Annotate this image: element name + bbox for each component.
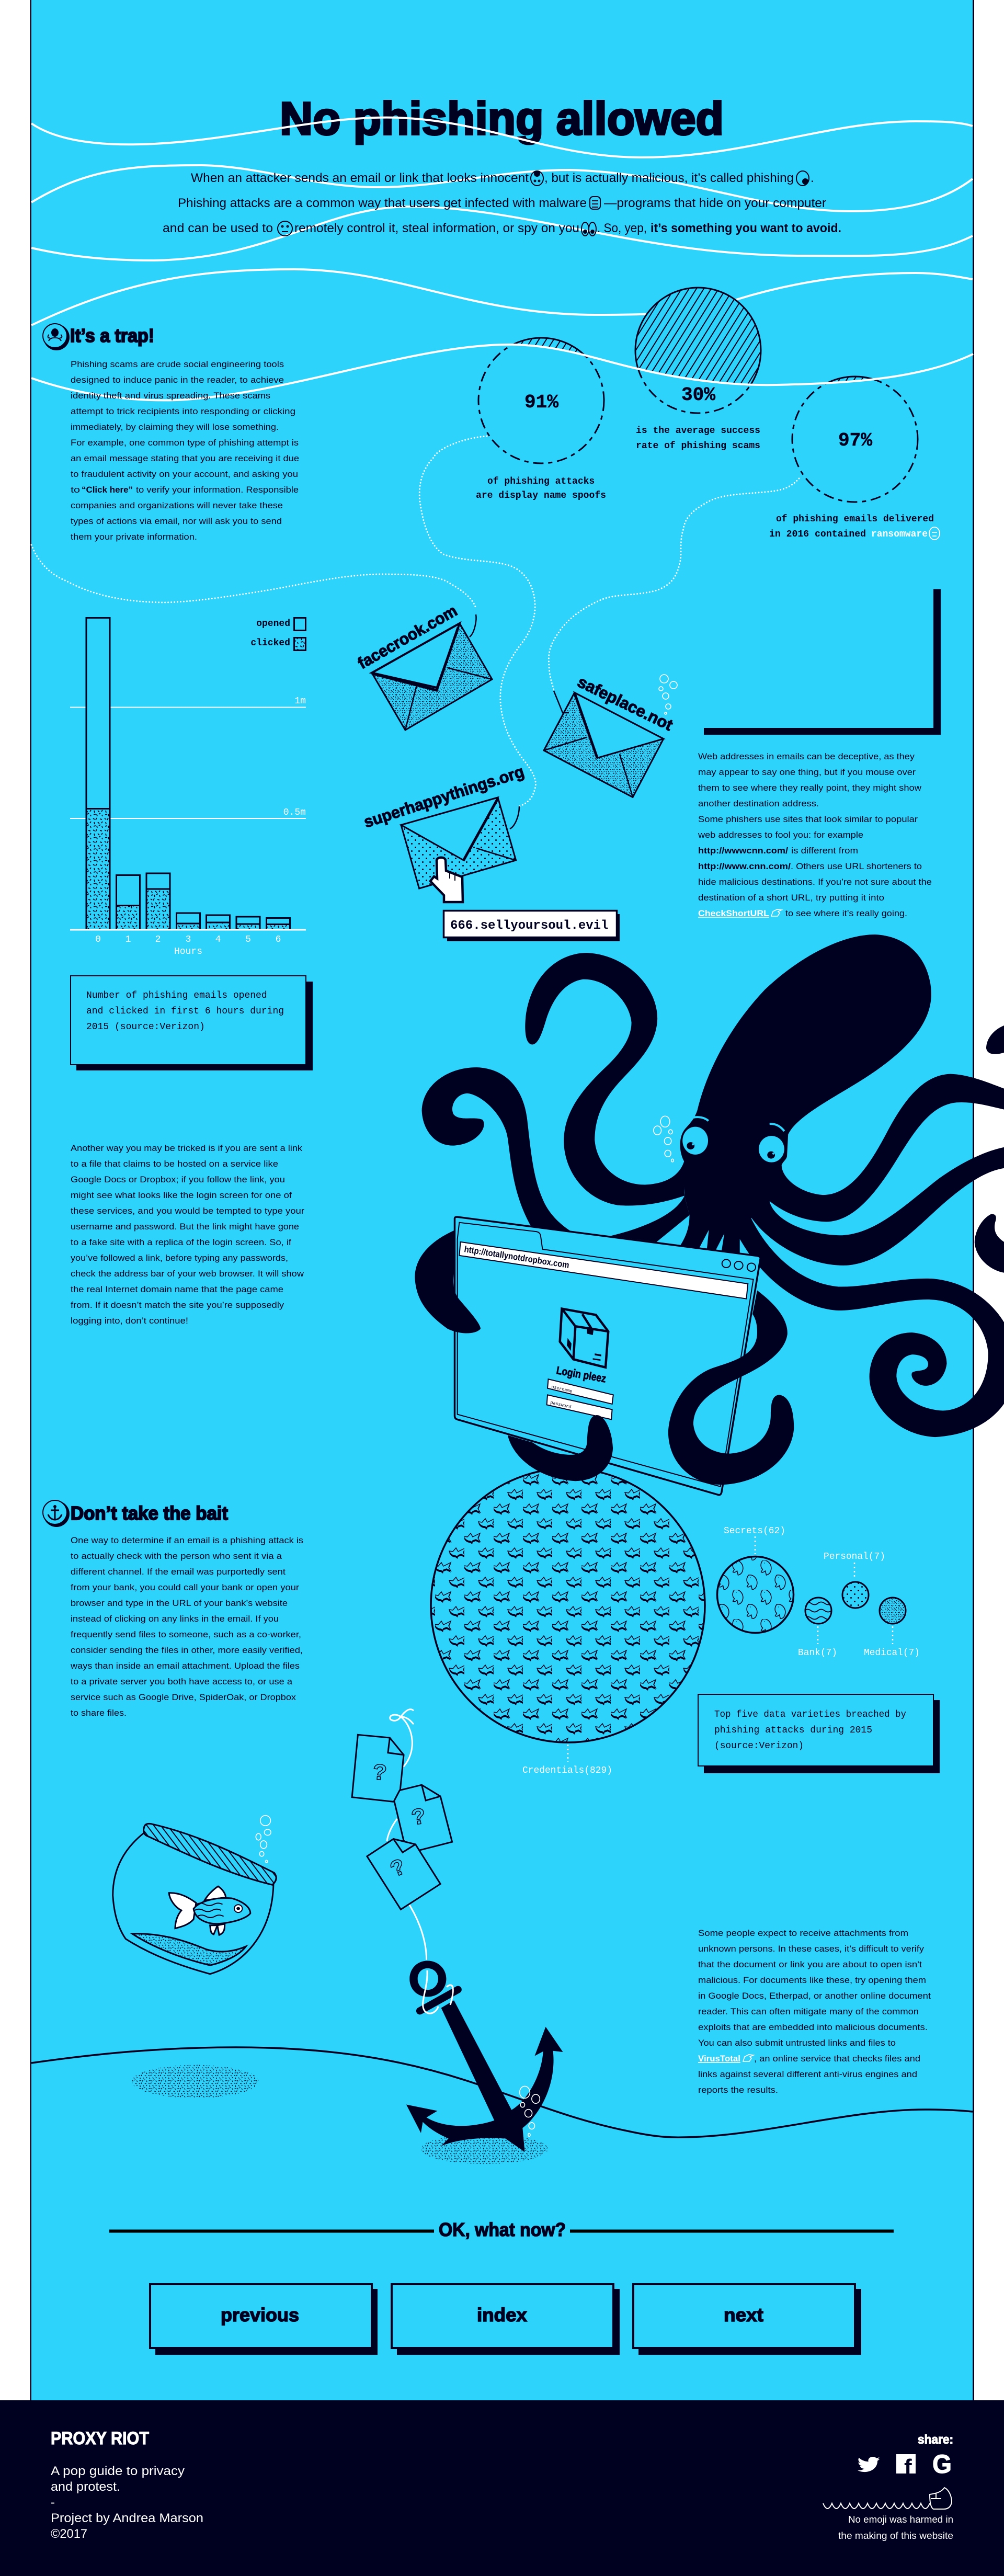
text block: phishing scams: immediately, by claiming they will lose something. bbox=[71, 422, 279, 432]
text block: attachments: reports the results. bbox=[698, 2085, 778, 2095]
legend bbox=[250, 618, 305, 651]
text block: phishing scams: Phishing scams are crude social engineering tools bbox=[71, 359, 284, 369]
bar: hour 2 bbox=[146, 873, 170, 930]
text block: attachments: malicious. For documents like these, try opening them bbox=[698, 1975, 926, 1985]
text block: web addresses: http://wwwcnn.com/ bbox=[698, 846, 788, 856]
intro paragraph: Phishing attacks are a common way that users get infected with malware bbox=[178, 196, 587, 210]
arm: middle right bbox=[751, 1147, 1004, 1266]
intro paragraph: —programs that hide on your computer bbox=[604, 196, 826, 210]
icon: google: G bbox=[932, 2449, 952, 2479]
envelope: safeplace: safeplace.not bbox=[575, 673, 676, 734]
text block: verify via another channel: to share files. bbox=[71, 1708, 127, 1718]
icon: octopus badge bbox=[43, 324, 70, 350]
seabed line bbox=[31, 2047, 973, 2137]
section heading: It's a trap bbox=[43, 324, 154, 350]
legend: opened bbox=[256, 619, 290, 629]
heading: OK, what now bbox=[109, 2219, 894, 2240]
text block: phishing scams: to fraudulent activity on your account, and asking you bbox=[71, 469, 298, 479]
bar: hour 0 bbox=[86, 618, 110, 930]
icon: malware emoji bbox=[590, 197, 600, 209]
stat: 91 percent: of phishing attacks bbox=[487, 476, 595, 487]
footer description: - bbox=[51, 2495, 55, 2510]
bubbles bbox=[654, 1116, 674, 1162]
footer description: A pop guide to privacy bbox=[51, 2464, 185, 2478]
question marks on files bbox=[372, 1760, 428, 1884]
icon: eyes emoji bbox=[581, 222, 596, 236]
bubble: credentials bbox=[431, 1468, 705, 1742]
intro paragraph: . So, yep, bbox=[597, 221, 647, 235]
intro paragraph: . bbox=[811, 171, 814, 185]
stat: 97 percent: ransomware bbox=[871, 529, 928, 540]
icon: bubbles bbox=[659, 675, 677, 714]
footer description bbox=[51, 2464, 203, 2541]
shadow under bowl bbox=[132, 2065, 259, 2098]
stat: 30 percent: rate of phishing scams bbox=[636, 441, 760, 451]
file 3 bbox=[367, 1839, 440, 1909]
share links bbox=[858, 2433, 953, 2480]
button: previous: previous bbox=[221, 2304, 299, 2326]
icon: phishing emoji bbox=[796, 171, 809, 186]
stat: 91 percent: are display name spoofs bbox=[476, 491, 606, 501]
bubble chart: data varieties breached: Secrets(62) bbox=[724, 1526, 785, 1536]
icon: fish hook bbox=[510, 806, 519, 829]
text block: web addresses: may appear to say one thing, but if you mouse over bbox=[698, 767, 916, 777]
text block: web addresses bbox=[698, 751, 932, 918]
bar: hour 6 bbox=[267, 918, 290, 930]
arm: left curl bbox=[422, 1067, 572, 1232]
text block: fake file link: from. If it doesn’t match the site you’re supposedly bbox=[71, 1300, 284, 1310]
text block: web addresses: to see where it’s really going. bbox=[785, 908, 907, 918]
bar: hour 5 bbox=[236, 917, 260, 930]
footer description: Project by Andrea Marson bbox=[51, 2511, 203, 2525]
bar chart: phishing emails opened and clicked: 1 bbox=[126, 934, 131, 945]
text block: attachments: unknown persons. In these cases, it’s difficult to verify bbox=[698, 1944, 925, 1954]
intro paragraph: it’s something you want to avoid. bbox=[651, 221, 841, 235]
text block: phishing scams: them your private information. bbox=[71, 532, 197, 542]
arm: upper right bbox=[769, 1074, 1004, 1222]
text block: verify via another channel: browser and type in the URL of your bank’s website bbox=[71, 1598, 288, 1608]
tooltip: fake url: 666.sellyoursoul.evil bbox=[450, 919, 608, 933]
icon: facebook bbox=[896, 2454, 916, 2480]
text block: fake file link: check the address bar of your web browser. It will show bbox=[71, 1269, 304, 1279]
octopus front arms bbox=[415, 1230, 794, 1485]
icon: fish hook bbox=[470, 614, 476, 637]
arm: left gripping window bbox=[415, 1230, 481, 1333]
text block: fake file link: to a file that claims to be hosted on a service like bbox=[71, 1159, 278, 1169]
octopus bbox=[422, 934, 1004, 1437]
stat: 30 percent bbox=[635, 288, 761, 451]
bar chart: phishing emails opened and clicked: 4 bbox=[215, 934, 221, 945]
text block: attachments: VirusTotal bbox=[698, 2054, 740, 2064]
envelope: safeplace bbox=[544, 673, 677, 797]
bar chart: phishing emails opened and clicked: 1m bbox=[294, 696, 306, 706]
bubble: personal bbox=[842, 1582, 869, 1608]
bubble: secrets bbox=[717, 1556, 794, 1633]
intro paragraph: and can be used to bbox=[163, 221, 273, 235]
eye: left bbox=[682, 1127, 708, 1155]
text block: verify via another channel: different channel. If the email was purportedly sent bbox=[71, 1567, 286, 1577]
button: index bbox=[392, 2284, 620, 2355]
text block: attachments: links against several different anti-virus engines and bbox=[698, 2069, 917, 2079]
text block: verify via another channel: ways than inside an email attachment. Upload the files bbox=[70, 1661, 300, 1671]
anchor bbox=[406, 1961, 563, 2152]
caption box: data varieties source: phishing attacks during 2015 bbox=[714, 1725, 872, 1736]
caption box: data varieties source: (source:Verizon) bbox=[714, 1741, 804, 1751]
arm tip: off panel curl bbox=[975, 1214, 1004, 1273]
heading: OK, what now: OK, what now? bbox=[439, 2219, 566, 2240]
button: previous bbox=[150, 2284, 378, 2355]
bar chart: phishing emails opened and clicked: 0.5m bbox=[283, 807, 306, 818]
text block: verify via another channel: instead of clicking on any links in the email. If you bbox=[71, 1614, 279, 1624]
text block: fake file link: you’ve followed a link, before typing any passwords, bbox=[71, 1253, 288, 1263]
bar chart: phishing emails opened and clicked: 5 bbox=[245, 934, 251, 945]
envelope: facecrook bbox=[355, 601, 492, 730]
text block: phishing scams bbox=[71, 359, 299, 542]
bar chart: phishing emails opened and clicked: 2 bbox=[155, 934, 161, 945]
text block: web addresses: them to see where they really point, they might show bbox=[698, 783, 922, 793]
title: No phishing allowed bbox=[280, 93, 724, 144]
button: index: index bbox=[477, 2304, 527, 2326]
text block: fake file link: Another way you may be tricked is if you are sent a link bbox=[71, 1143, 303, 1153]
stat: 30 percent: 30% bbox=[681, 384, 715, 406]
icon: anchor badge bbox=[43, 1500, 70, 1527]
arm tip: off panel top bbox=[986, 1025, 1004, 1054]
question marks on files: ? bbox=[410, 1804, 428, 1832]
text block: web addresses: CheckShortURL bbox=[698, 908, 769, 918]
browser window: fake login page bbox=[454, 1217, 760, 1495]
envelope: superhappythings bbox=[361, 762, 527, 902]
goldfish bbox=[169, 1886, 250, 1935]
bar chart: phishing emails opened and clicked: 3 bbox=[186, 934, 191, 945]
arm: bottom gripping window bbox=[508, 1415, 613, 1481]
text block: attachments: in Google Docs, Etherpad, or another online document bbox=[698, 1991, 931, 2001]
bubble chart: data varieties breached: Medical(7) bbox=[864, 1648, 920, 1658]
logo: PROXY RIOT bbox=[51, 2429, 149, 2448]
eye: right bbox=[759, 1136, 784, 1162]
envelope: facecrook: facecrook.com bbox=[355, 601, 460, 673]
text block: fake file link: these services, and you would be tempted to type your bbox=[71, 1206, 304, 1216]
text block: verify via another channel: to a private server you both have access to, or use a bbox=[71, 1677, 293, 1686]
browser window: fake login page: http://totallynotdropbox.com bbox=[463, 1244, 570, 1270]
text block: phishing scams: “Click here” bbox=[82, 485, 133, 495]
icon: ransomware emoji bbox=[929, 527, 940, 540]
bar chart: phishing emails opened and clicked: Hours bbox=[174, 947, 202, 957]
icon: facebook: f bbox=[904, 2455, 912, 2480]
icon: twitter bbox=[858, 2457, 880, 2472]
text block: attachments: You can also submit untrusted links and files to bbox=[698, 2038, 896, 2048]
text block: web addresses: Web addresses in emails can be deceptive, as they bbox=[698, 751, 915, 761]
arm: s-curve right of window bbox=[668, 1290, 794, 1485]
icon: remote control emoji bbox=[278, 221, 292, 236]
text block: attachments: exploits that are embedded into malicious documents. bbox=[698, 2022, 928, 2032]
text block: phishing scams: designed to induce panic in the reader, to achieve bbox=[71, 375, 284, 385]
bar: hour 4 bbox=[206, 915, 230, 930]
share links: share: bbox=[918, 2433, 953, 2447]
text block: phishing scams: types of actions via email, nor will ask you to send bbox=[71, 516, 282, 526]
text block: phishing scams: identity theft and virus spreading. These scams bbox=[71, 391, 270, 401]
icon: innocent emoji bbox=[531, 171, 543, 186]
text block: web addresses: Some phishers use sites that look similar to popular bbox=[698, 814, 918, 824]
text block: phishing scams: companies and organizations will never take these bbox=[71, 500, 283, 510]
footer description: ©2017 bbox=[51, 2527, 87, 2541]
text block: phishing scams: to verify your information. Responsible bbox=[136, 485, 299, 495]
text block: fake file link: username and password. But the link might have gone bbox=[71, 1222, 299, 1232]
text block: web addresses: is different from bbox=[791, 846, 858, 856]
caption box: chart source: Number of phishing emails opened bbox=[86, 990, 267, 1001]
icon: fish hook bbox=[554, 691, 569, 713]
text block: verify via another channel bbox=[70, 1535, 303, 1718]
section heading: Don't take the bait: Don’t take the bait bbox=[71, 1502, 228, 1524]
stat: 97 percent bbox=[769, 377, 940, 540]
legend: clicked bbox=[250, 638, 290, 648]
arm: upper left bbox=[525, 953, 684, 1205]
intro paragraph: When an attacker sends an email or link that looks innocent bbox=[191, 171, 529, 185]
icon: pointing hand bbox=[743, 2055, 754, 2061]
text block: fake file link bbox=[71, 1143, 304, 1326]
text block: fake file link: Google Docs or Dropbox; if you follow the link, you bbox=[71, 1175, 285, 1184]
footer note: No emoji was harmed in bbox=[848, 2514, 953, 2525]
text block: attachments: Some people expect to receive attachments from bbox=[698, 1928, 908, 1938]
text block: web addresses: another destination address. bbox=[698, 799, 819, 808]
text block: fake file link: the real Internet domain name that the page came bbox=[71, 1284, 283, 1294]
text block: fake file link: to a fake site with a replica of the login screen. So, if bbox=[71, 1237, 291, 1247]
bar: hour 1 bbox=[116, 875, 140, 930]
decorative corner frame bbox=[704, 589, 941, 735]
tooltip: fake url bbox=[443, 911, 620, 941]
text block: verify via another channel: consider sending the files in other, more easily verified, bbox=[71, 1645, 303, 1655]
text block: phishing scams: For example, one common type of phishing attempt is bbox=[71, 438, 299, 448]
footer note: the making of this website bbox=[838, 2531, 953, 2541]
string bbox=[387, 1717, 453, 2013]
browser window: fake login page: password bbox=[550, 1400, 572, 1410]
text block: attachments: , an online service that checks files and bbox=[754, 2054, 920, 2064]
text block: phishing scams: attempt to trick recipients into responding or clicking bbox=[71, 406, 295, 416]
bubble chart: data varieties breached: Bank(7) bbox=[798, 1648, 837, 1658]
section heading: Don't take the bait bbox=[43, 1500, 228, 1527]
text block: verify via another channel: One way to determine if an email is a phishing attack is bbox=[71, 1535, 303, 1545]
text block: fake file link: might see what looks like the login screen for one of bbox=[71, 1190, 292, 1200]
intro paragraph: remotely control it, steal information, or spy on you bbox=[294, 221, 579, 235]
text block: verify via another channel: to actually check with the person who sent it via a bbox=[71, 1551, 282, 1561]
stat: 30 percent: is the average success bbox=[636, 426, 760, 436]
text block: phishing scams: an email message stating that you are receiving it due bbox=[71, 453, 299, 463]
text block: web addresses: web addresses to fool you: for example bbox=[698, 830, 863, 840]
caption box: data varieties source bbox=[698, 1694, 940, 1773]
text block: web addresses: . Others use URL shorteners to bbox=[791, 861, 922, 871]
stat: 97 percent: in 2016 contained bbox=[769, 529, 866, 540]
caption box: chart source: 2015 (source:Verizon) bbox=[86, 1022, 205, 1032]
text block: fake file link: logging into, don’t continue! bbox=[71, 1316, 188, 1326]
bubble chart: data varieties breached bbox=[431, 1468, 920, 1776]
envelope: superhappythings: superhappythings.org bbox=[361, 762, 527, 831]
icon: pointing hand bbox=[771, 909, 782, 916]
shadow under anchor bbox=[421, 2134, 548, 2164]
text block: phishing scams: to bbox=[71, 485, 80, 495]
octopus head and body bbox=[680, 934, 931, 1256]
text block: web addresses: http://www.cnn.com/ bbox=[698, 861, 791, 871]
stat: 97 percent: 97% bbox=[838, 430, 872, 451]
text block: attachments bbox=[698, 1928, 931, 2095]
icon: hand cursor bbox=[430, 858, 463, 902]
string of files and anchor bbox=[113, 1709, 563, 2164]
eyebrows bbox=[690, 1117, 784, 1131]
text block: attachments: that the document or link you are about to open isn't bbox=[698, 1959, 922, 1969]
text block: attachments: reader. This can often mitigate many of the common bbox=[698, 2007, 919, 2016]
browser window: fake login page: Login pleez bbox=[555, 1364, 607, 1385]
bar chart: phishing emails opened and clicked: 0 bbox=[95, 934, 101, 945]
button: next: next bbox=[724, 2304, 763, 2326]
intro paragraph: , but is actually malicious, it’s called phishing bbox=[544, 171, 794, 185]
file 1 bbox=[352, 1735, 404, 1802]
bubble chart: data varieties breached: Credentials(829) bbox=[522, 1765, 612, 1776]
fishbowl bbox=[113, 1816, 276, 1974]
text block: verify via another channel: from your bank, you could call your bank or open your bbox=[71, 1582, 299, 1592]
footer description: and protest. bbox=[51, 2480, 120, 2494]
arm: strap to window bbox=[610, 1195, 690, 1242]
bar chart: phishing emails opened and clicked: 6 bbox=[276, 934, 281, 945]
bubble: medical bbox=[880, 1598, 906, 1624]
footer note bbox=[838, 2514, 953, 2541]
stat: 91 percent bbox=[476, 338, 606, 501]
footer bbox=[0, 2400, 1004, 2576]
question marks on files: ? bbox=[372, 1760, 387, 1787]
icon: whale on waves bbox=[823, 2488, 952, 2509]
bubbles bbox=[256, 1816, 271, 1863]
question marks on files: ? bbox=[387, 1854, 410, 1884]
caption box: chart source: and clicked in first 6 hours during bbox=[86, 1006, 284, 1017]
intro paragraph bbox=[163, 171, 841, 236]
section heading: It's a trap: It’s a trap! bbox=[70, 325, 154, 346]
text block: web addresses: hide malicious destinations. If you’re not sure about the bbox=[698, 877, 932, 887]
bubble: bank bbox=[804, 1598, 831, 1624]
arm: lower right spiral bbox=[740, 1219, 1004, 1437]
bubble chart: data varieties breached: Personal(7) bbox=[824, 1552, 885, 1562]
caption box: data varieties source: Top five data varieties breached by bbox=[714, 1709, 906, 1720]
button: next bbox=[633, 2284, 861, 2355]
caption box: chart source bbox=[71, 976, 313, 1070]
stat: 97 percent: of phishing emails delivered bbox=[776, 514, 934, 525]
browser window: fake login page: username bbox=[551, 1384, 573, 1394]
bar chart: phishing emails opened and clicked bbox=[70, 618, 306, 957]
stat: 91 percent: 91% bbox=[524, 392, 558, 413]
bar: hour 3 bbox=[177, 913, 200, 930]
text block: verify via another channel: frequently send files to someone, such as a co-worker, bbox=[71, 1629, 301, 1639]
text block: web addresses: destination of a short URL, try putting it into bbox=[698, 893, 884, 903]
text block: verify via another channel: service such as Google Drive, SpiderOak, or Dropbox bbox=[71, 1692, 296, 1702]
file 2 bbox=[394, 1785, 452, 1850]
